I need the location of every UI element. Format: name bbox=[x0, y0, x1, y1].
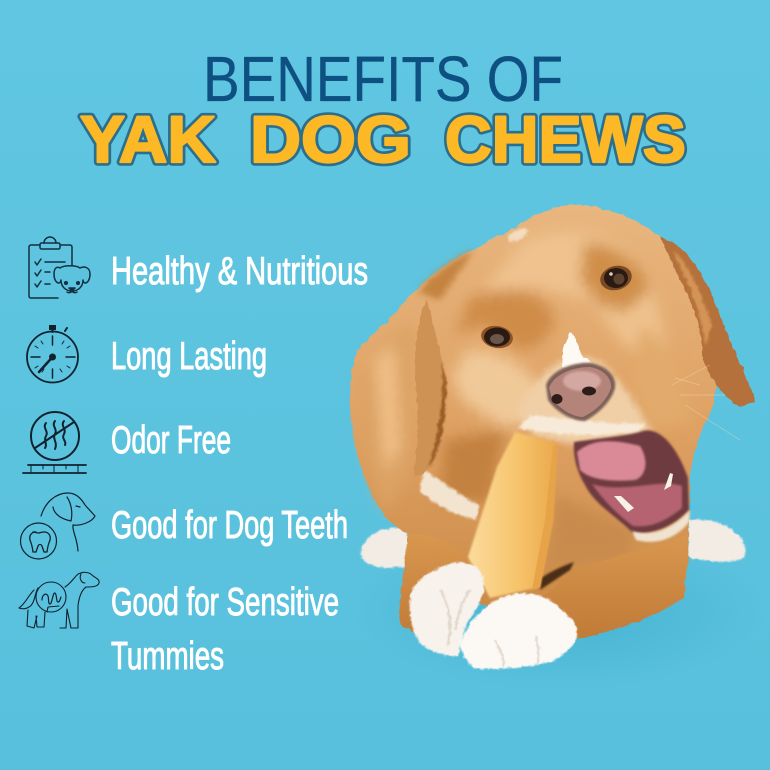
upper lip bbox=[518, 415, 645, 435]
benefits list bbox=[19, 237, 368, 678]
shoulder shadow behind head bbox=[418, 250, 474, 300]
icon: clipboard with dog bbox=[29, 237, 90, 298]
title line: yak dog chews bbox=[80, 102, 686, 176]
fur shading bbox=[362, 231, 692, 565]
title line: yak dog chews: YAK bbox=[80, 102, 216, 176]
open mouth bbox=[574, 430, 690, 542]
icon: dog head with tooth bbox=[20, 493, 95, 559]
white blaze bbox=[562, 333, 592, 368]
label line two: Tummies bbox=[111, 635, 224, 678]
label line one: Good for Sensitive bbox=[111, 581, 339, 624]
label: odor free: Odor Free bbox=[111, 419, 231, 462]
icon: dog with stomach bbox=[19, 572, 99, 628]
eye right bbox=[597, 262, 635, 294]
icon: stopwatch bbox=[27, 325, 78, 382]
benefit: odor free bbox=[23, 412, 231, 473]
benefit: healthy and nutritious bbox=[29, 237, 368, 298]
forearm right bbox=[520, 535, 688, 640]
label: good for sensitive tummies bbox=[111, 581, 339, 678]
white forehead tuft bbox=[506, 226, 530, 244]
title line: yak dog chews: DOG bbox=[250, 102, 411, 176]
dog fur mass bbox=[350, 205, 755, 640]
whiskers bbox=[672, 365, 740, 440]
label: healthy and nutritious: Healthy & Nutritious bbox=[111, 250, 368, 293]
title line: yak dog chews: YAK bbox=[80, 102, 216, 176]
title line: yak dog chews: CHEWS bbox=[445, 102, 686, 176]
right ear bbox=[660, 237, 755, 407]
benefit: long lasting bbox=[27, 325, 267, 382]
forearm left bbox=[400, 534, 482, 640]
dog photo illustration bbox=[350, 205, 770, 690]
benefit: good for sensitive tummies bbox=[19, 572, 339, 678]
front paw right bbox=[460, 593, 578, 669]
floor shadow bbox=[350, 530, 770, 690]
muzzle bbox=[518, 357, 652, 447]
title line: yak dog chews: CHEWS bbox=[445, 102, 686, 176]
label: long lasting: Long Lasting bbox=[111, 335, 267, 378]
label: good for dog teeth: Good for Dog Teeth bbox=[111, 504, 348, 547]
benefit: good for dog teeth bbox=[20, 493, 348, 559]
title line: yak dog chews: DOG bbox=[250, 102, 411, 176]
left ear bbox=[414, 298, 447, 477]
body silhouette bbox=[350, 205, 720, 637]
nose bbox=[546, 363, 615, 421]
back paw left bbox=[360, 527, 409, 568]
icon: no odor bbox=[23, 412, 86, 473]
eye left bbox=[479, 323, 515, 351]
title bbox=[80, 43, 686, 176]
dark gap beside chew bbox=[540, 562, 574, 590]
title line: benefits of: BENEFITS OF bbox=[203, 43, 563, 115]
white chest patch bbox=[419, 470, 480, 520]
front paw left bbox=[410, 562, 484, 657]
back paw right bbox=[688, 519, 746, 562]
yak chew bbox=[468, 432, 557, 598]
